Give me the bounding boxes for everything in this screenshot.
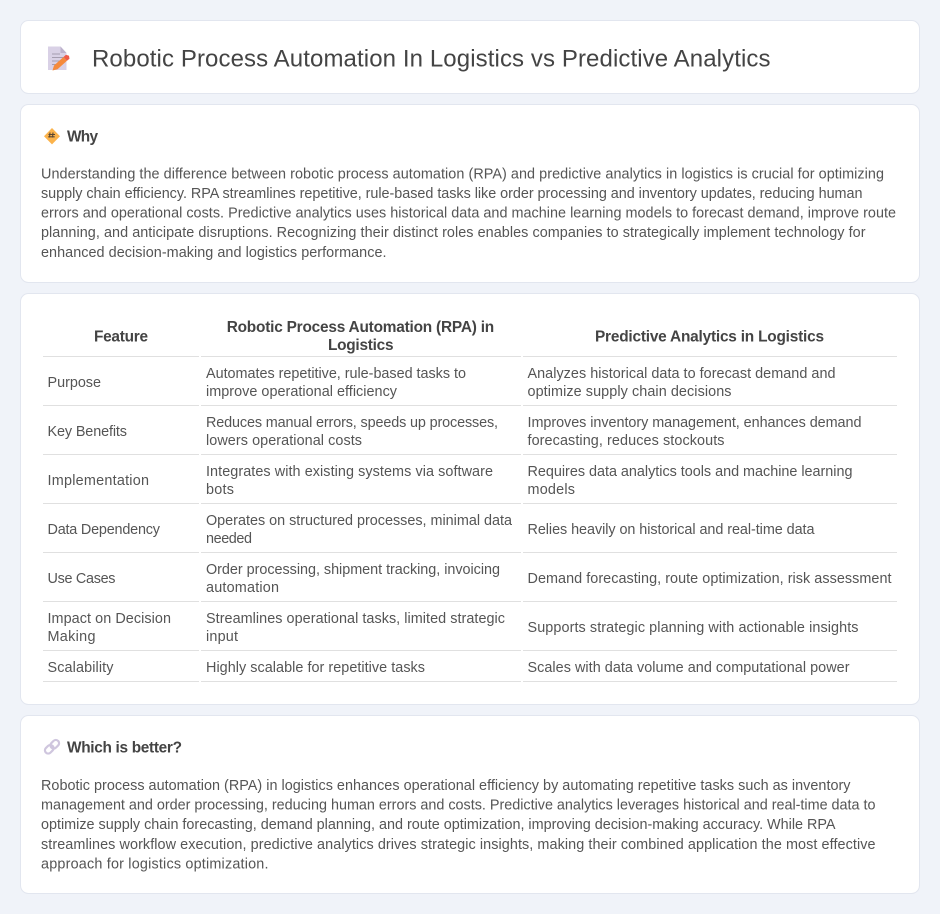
table row: impact on decision making: input (206, 629, 238, 645)
panel: why (20, 104, 920, 282)
table row: purpose: optimize supply chain decisions (528, 384, 732, 400)
text block: why paragraph: planning, and anticipate disruptions. Recognizing their distinct roles enables companies to strategically implement technology for (41, 225, 866, 241)
text block: which paragraph: management and order processing, reducing human errors and costs. Predictive analytics leverages historical and real-time data to (41, 798, 876, 814)
table row: implementation: Implementation (48, 473, 149, 489)
table row: use cases (48, 562, 892, 596)
table header row: Feature (94, 329, 148, 346)
text block: why paragraph: supply chain efficiency. RPA streamlines repetitive, rule-based tasks like order processing and inventory updates, reducing human (41, 186, 862, 202)
table row: scalability: Scalability (48, 660, 114, 676)
table row: scalability: Highly scalable for repetitive tasks (206, 660, 425, 676)
text block: which paragraph: approach for logistics optimization. (41, 856, 268, 872)
table header row: Logistics (328, 337, 394, 354)
table row: purpose: Automates repetitive, rule-based tasks to (206, 366, 466, 382)
table row: key benefits: Key Benefits (48, 424, 127, 440)
table row: use cases: Use Cases (48, 571, 116, 587)
table row: purpose: Analyzes historical data to forecast demand and (528, 366, 836, 382)
panel: which is better (20, 716, 920, 894)
text block: which paragraph (41, 778, 876, 872)
table row: purpose: improve operational efficiency (206, 384, 398, 400)
table row: key benefits: Improves inventory management, enhances demand (528, 415, 862, 431)
table row: implementation: Requires data analytics tools and machine learning (528, 464, 852, 480)
icon: link (44, 739, 60, 755)
title: Robotic Process Automation In Logistics vs Predictive Analytics (92, 46, 770, 72)
table row: scalability (48, 660, 850, 676)
table row: data dependency: Operates on structured processes, minimal data (206, 513, 512, 529)
table row: impact on decision making: Impact on Decision (48, 611, 171, 627)
text block: why paragraph: errors and operational costs. Predictive analytics uses historical data and machine learning models to forecast demand, improve route (41, 206, 896, 222)
table row: key benefits: lowers operational costs (206, 433, 362, 449)
table header row (94, 319, 824, 354)
table row: impact on decision making: Making (48, 629, 96, 645)
text block: which paragraph: streamlines workflow execution, predictive analytics drives strategic insights, making their combined application the most effective (41, 837, 876, 853)
table row: implementation: models (528, 482, 575, 498)
table row: use cases: automation (206, 580, 279, 596)
text block: which paragraph: Robotic process automation (RPA) in logistics enhances operational efficiency by automating repetitive tasks such as inventory (41, 778, 851, 794)
table header row: Predictive Analytics in Logistics (595, 329, 824, 346)
table row: purpose: Purpose (48, 375, 101, 391)
table row: impact on decision making (48, 611, 858, 645)
table row: purpose (48, 366, 836, 400)
table row: data dependency: Data Dependency (48, 522, 161, 538)
table row: implementation: Integrates with existing systems via software (206, 464, 493, 480)
table row: scalability: Scales with data volume and computational power (528, 660, 850, 676)
text block: which paragraph: optimize supply chain forecasting, demand planning, and route optimization, improving decision-making accuracy. While RPA (41, 817, 836, 833)
table row: impact on decision making: Streamlines operational tasks, limited strategic (206, 611, 505, 627)
heading: why: Why (67, 129, 98, 146)
table row: data dependency: Relies heavily on historical and real-time data (528, 522, 814, 538)
table row: key benefits (48, 415, 862, 449)
table row: key benefits: Reduces manual errors, speeds up processes, (206, 415, 498, 431)
text block: why paragraph: Understanding the difference between robotic process automation (RPA) and predictive analytics in logistics is crucial for optimizing (41, 166, 884, 182)
table header row: Robotic Process Automation (RPA) in (227, 319, 494, 336)
icon: memo with pencil (48, 46, 70, 70)
panel: comparison table (20, 294, 920, 704)
heading: which is better: Which is better? (67, 740, 182, 757)
panel: header (20, 20, 920, 94)
table row: data dependency (48, 513, 814, 547)
table row: implementation: bots (206, 482, 234, 498)
table row: key benefits: forecasting, reduces stockouts (528, 433, 724, 449)
icon: diamond sign (44, 128, 60, 144)
table row: use cases: Demand forecasting, route optimization, risk assessment (528, 571, 892, 587)
text block: why paragraph: enhanced decision-making and logistics performance. (41, 245, 386, 261)
text block: why paragraph (41, 166, 896, 261)
table row: implementation (48, 464, 852, 498)
table row: data dependency: needed (206, 531, 252, 547)
table row: impact on decision making: Supports strategic planning with actionable insights (528, 620, 858, 636)
table row: use cases: Order processing, shipment tracking, invoicing (206, 562, 500, 578)
